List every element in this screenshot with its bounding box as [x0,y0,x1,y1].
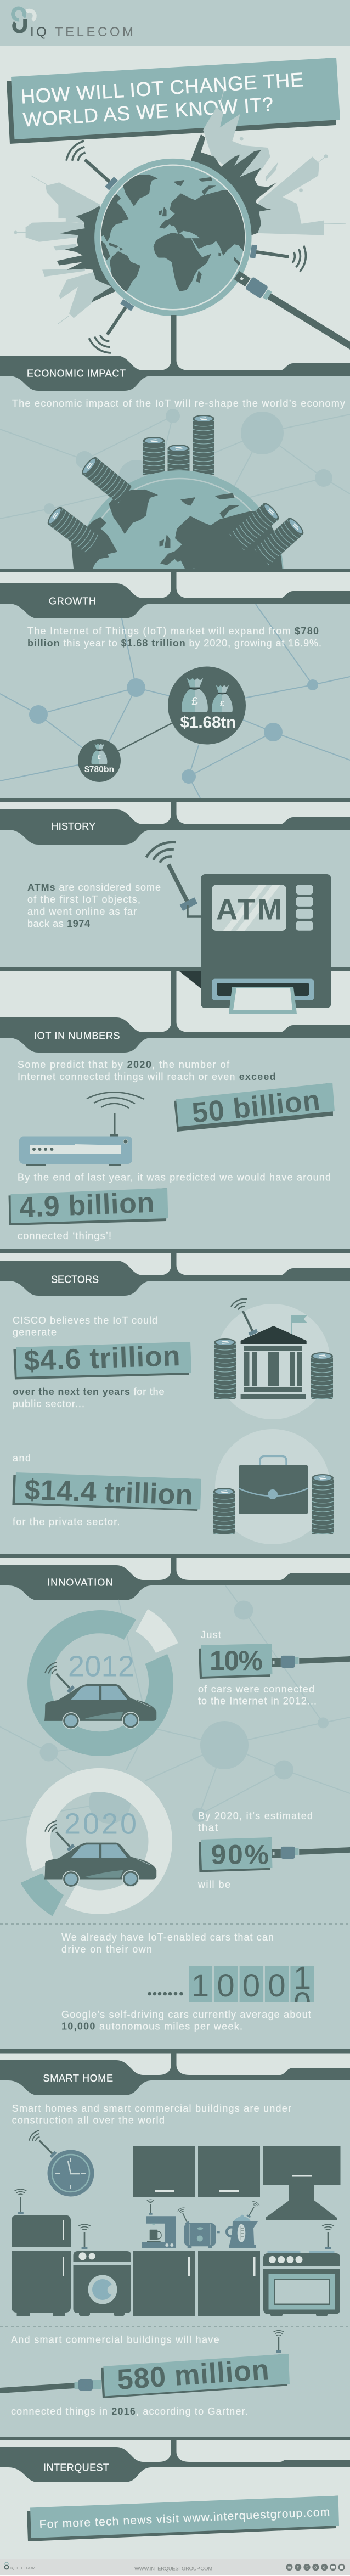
callout: 90% [199,1837,272,1872]
section tab [0,1256,350,1296]
usb plug [272,1656,350,1668]
body text: and [13,1453,31,1464]
icon: ATM machine [179,874,331,1014]
title banner: WORLD AS WE KNOW IT? [22,93,274,131]
icon: cooker hood [263,2146,340,2220]
money circle: 780bn: $780bn [84,765,114,774]
heading: INNOVATION [47,1577,113,1588]
usb cable plugged into globe [234,271,350,353]
title banner: HOW WILL IOT CHANGE THE [20,68,304,108]
body text: over the next ten years for the [13,1386,165,1397]
section: growth: billion this year to $1.68 trillion by 2020, growing at 16.9%. [27,638,321,649]
stem connecting globe to section bar [171,315,177,357]
section tab [0,2056,350,2095]
body text [13,1315,157,1338]
usb plug into banner [0,2379,101,2393]
callout: 90%: 90% [211,1839,269,1870]
body text: By 2020, it’s estimated [198,1810,313,1821]
body text: drive on their own [61,1944,152,1955]
heading: IOT IN NUMBERS [34,1031,120,1042]
body text: will be [197,1879,230,1890]
odometer counter: 1 [191,1968,209,2004]
body text: generate [13,1327,57,1338]
intro text: The Internet of Things (IoT) market will expand from $780 [27,626,319,637]
section tab [0,351,350,391]
ring chart: 2012 [27,1609,178,1756]
icon: toaster [177,2207,220,2248]
coin stacks upright [143,415,214,475]
money circle: 1.68tn: £ [220,699,225,708]
callout: 50 billion: 50 billion [190,1084,321,1129]
section tab [0,1561,350,1600]
light skyline silhouettes [14,88,346,324]
heading: ECONOMIC IMPACT [27,368,126,379]
footer [0,2559,350,2576]
heading: HISTORY [52,821,95,832]
body text: connected ‘things’! [18,1230,111,1241]
body text [198,1810,313,1833]
body text: By the end of last year, it was predicted we would have around [18,1172,331,1183]
odometer counter: 1 [293,1960,311,1996]
footer logo: IQ TELECOM [10,2566,35,2571]
body text: to the Internet in 2012... [198,1696,317,1707]
icon: wall clock [27,2129,94,2196]
icon: antenna top-left [64,138,122,195]
icon: antenna on banner [273,2331,284,2353]
callout: 4.6 trillion: $4.6 trillion [24,1340,180,1377]
body text: of the first IoT objects, [27,894,140,905]
odometer counter [148,1966,314,2002]
body text: and went online as far [27,906,137,917]
network background [0,1586,350,1824]
body text: of cars were connected [198,1684,314,1695]
heading: INTERQUEST [43,2462,109,2473]
globe ring [94,159,252,316]
section: smart home [0,2053,350,2440]
call to action banner: For more tech news visit www.interquestgroup.com [39,2506,330,2531]
section tab [0,1013,350,1053]
money circle: 780bn [78,739,121,782]
body text [12,2103,291,2126]
icon: car antenna [43,1819,78,1854]
body text: back as 1974 [27,918,90,929]
section: IoT in numbers [0,971,350,1253]
body text: And smart commercial buildings will have [11,2335,219,2346]
social icons: in [287,2566,291,2569]
callout: 580 million: 580 million [116,2354,270,2396]
money circle: 1.68tn: $1.68tn [180,713,236,732]
body text [27,882,161,929]
hero illustration: globe with cities [7,58,350,357]
callout: 14.4 trillion: $14.4 trillion [24,1474,193,1511]
section: history [0,802,350,1014]
body text: public sector... [13,1398,84,1409]
body text: for the private sector. [13,1516,120,1527]
heading: SMART HOME [43,2073,113,2084]
icon: connected car [44,1684,156,1729]
icon: wall cabinets [133,2146,260,2197]
section: innovation [0,1558,350,2054]
section tab [0,2443,350,2482]
icon: bank with coins [214,1297,333,1419]
body text: connected things in 2016, according to Gartner. [11,2406,248,2417]
body text [18,1059,276,1082]
odometer counter: 0 [293,1986,311,2022]
icon: ATM antenna [144,838,205,915]
body text: Internet connected things will reach or even exceed [18,1071,276,1082]
globe and skylines [14,88,350,353]
heading: SECTORS [51,1274,99,1285]
ring chart: 2020: 2020 [64,1808,137,1841]
body text: that [198,1822,218,1833]
body text [61,1932,274,1955]
body text [61,2009,311,2032]
network background [0,604,350,798]
icon: stove and oven [263,2224,340,2316]
body text: Smart homes and smart commercial buildings are under [12,2103,291,2114]
body text: ATMs are considered some [27,882,161,893]
money circle: 1.68tn: £ [191,695,198,707]
dark skyline silhouettes [57,134,277,302]
ring chart: 2012: 2012 [68,1650,134,1683]
body text: Google’s self-driving cars currently average about [61,2009,311,2020]
icon: kettle [227,2201,260,2248]
icon: connected car [44,1843,156,1887]
section: interquest [0,2440,350,2541]
callout: 10% [199,1644,272,1679]
section: sectors [0,1253,350,1558]
odometer counter: 0 [268,1968,286,2004]
intro text: The economic impact of the IoT will re-shape the world’s economy [12,398,345,409]
icon: IQ Telecom logo [13,8,35,31]
icon: base cabinets [133,2251,260,2316]
money circle: 1.68tn [168,666,246,744]
section tab [0,579,350,618]
call to action banner [27,2496,339,2541]
icon: antenna bottom-left [87,295,139,356]
social icons: t [306,2566,308,2569]
social icons: f [297,2566,299,2569]
half globe with world map [71,470,284,569]
icon: washing machine [74,2224,131,2316]
icon: car antenna [43,1661,78,1696]
social icons: g [323,2566,325,2569]
footer logo [5,2562,35,2571]
logo wordmark: IQ TELECOM [30,25,133,40]
usb plug [272,1847,350,1859]
section: growth [0,572,350,802]
odometer counter: 0 [217,1968,235,2004]
callout: 4.9 billion: 4.9 billion [19,1187,155,1224]
social icons: o [314,2566,317,2569]
ring chart: 2020 [20,1768,172,1916]
money circle: 780bn: £ [98,754,101,761]
body text: 10,000 autonomous miles per week. [61,2021,242,2032]
body text: construction all over the world [12,2115,165,2126]
network background [0,409,350,519]
icon: coffee machine [142,2200,176,2248]
body text: We already have IoT-enabled cars that can [61,1932,274,1943]
coin stacks radiating [45,455,306,565]
icon: antenna right [249,238,308,272]
world map [96,175,248,291]
footer url: WWW.INTERQUESTGROUP.COM [134,2566,212,2572]
body text: Some predict that by 2020, the number of [18,1059,230,1070]
social icons [286,2564,345,2571]
icon: fridge [12,2189,71,2316]
heading: GROWTH [49,596,96,607]
body text [13,1386,165,1409]
callout: 10%: 10% [210,1645,263,1676]
header band with logo [0,0,350,46]
text: 10 percent: Just [201,1629,221,1640]
section: economic impact [0,356,350,572]
ATM wire [188,905,201,916]
icon: wifi router [19,1092,144,1166]
section tab [0,805,350,845]
body text: CISCO believes the IoT could [13,1315,157,1326]
odometer counter: 0 [242,1968,260,2004]
title banner [7,58,340,144]
icon: ATM machine: ATM [216,893,282,926]
body text [198,1684,317,1707]
icon: briefcase with coins [213,1429,334,1544]
